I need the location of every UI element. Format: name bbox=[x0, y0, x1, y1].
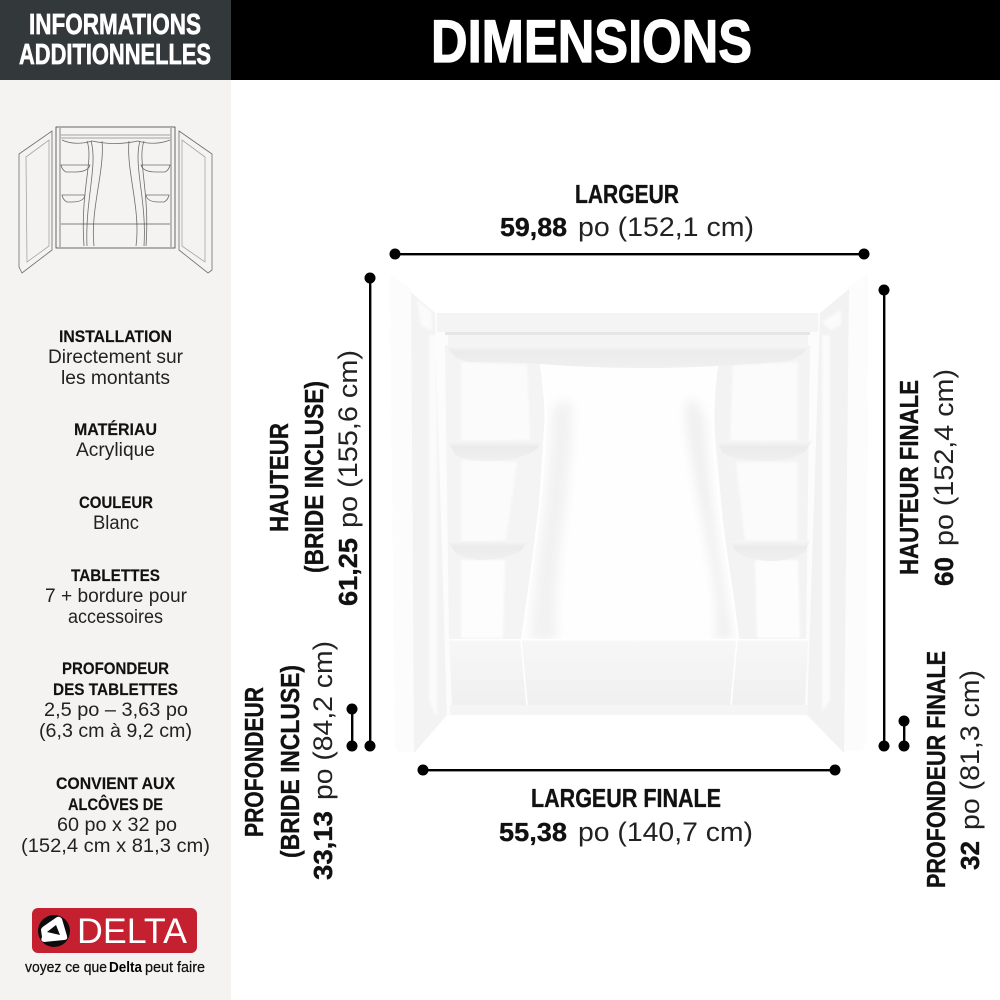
panel: sidebar background bbox=[0, 80, 231, 1000]
text: materiau: Acrylique bbox=[76, 440, 155, 461]
text: installation: Directement sur bbox=[48, 347, 184, 368]
left lower shelf bbox=[448, 541, 527, 560]
text: couleur: Blanc bbox=[93, 513, 139, 534]
label: largeur finale: po (140,7 cm) bbox=[578, 817, 753, 847]
label: hauteur finale: HAUTEUR FINALE bbox=[894, 380, 924, 575]
text: profondeur des tablettes bbox=[39, 659, 192, 742]
label: hauteur: HAUTEUR bbox=[264, 423, 294, 532]
right lower shelf bbox=[730, 541, 810, 561]
text: couleur: COULEUR bbox=[79, 493, 153, 512]
text: tablettes: 7 + bordure pour bbox=[45, 586, 188, 607]
left middle shelf bbox=[448, 441, 542, 461]
center panel bbox=[522, 360, 738, 640]
text: profondeur des tablettes: PROFONDEUR bbox=[62, 659, 169, 678]
header: dimensions title: DIMENSIONS bbox=[431, 8, 752, 75]
right side wall bbox=[807, 273, 868, 752]
text: convient aux alcoves: CONVIENT AUX bbox=[56, 774, 176, 793]
label: largeur finale: LARGEUR FINALE bbox=[531, 783, 721, 813]
label: profondeur: 33,13 bbox=[308, 811, 338, 880]
label: largeur bbox=[500, 179, 754, 242]
label: largeur finale bbox=[499, 783, 753, 847]
label: profondeur finale bbox=[921, 651, 985, 888]
label: profondeur finale: 32 bbox=[955, 841, 985, 870]
dimension line: largeur finale bbox=[418, 764, 840, 776]
label: hauteur finale: po (152,4 cm) bbox=[929, 369, 959, 546]
dimension line: hauteur bbox=[364, 272, 376, 752]
text: profondeur des tablettes: (6,3 cm à 9,2 cm) bbox=[39, 721, 192, 742]
bottom lip bbox=[450, 705, 807, 715]
header: left panel: ADDITIONNELLES bbox=[19, 39, 211, 71]
logo tagline bbox=[25, 959, 205, 976]
product image: shower walls bbox=[390, 273, 868, 752]
label: largeur: po (152,1 cm) bbox=[578, 212, 754, 242]
text: tablettes: accessoires bbox=[68, 607, 163, 628]
icon: line drawing of shower walls bbox=[19, 127, 212, 273]
label: profondeur: (BRIDE INCLUSE) bbox=[275, 665, 305, 858]
dimension line: hauteur finale bbox=[878, 284, 890, 752]
center shadows bbox=[530, 401, 572, 640]
right middle shelf bbox=[717, 441, 812, 461]
label: profondeur: PROFONDEUR bbox=[239, 687, 269, 837]
left wall highlights bbox=[417, 300, 437, 715]
logo tagline: voyez ce que bbox=[25, 959, 107, 976]
text: tablettes: TABLETTES bbox=[71, 566, 160, 585]
right flange bbox=[844, 273, 868, 752]
label: hauteur finale: 60 bbox=[929, 557, 959, 586]
back wall bbox=[435, 313, 820, 715]
label: hauteur finale bbox=[894, 369, 959, 586]
dimension line: largeur bbox=[390, 248, 870, 260]
dimension line: profondeur bbox=[346, 704, 358, 752]
label: hauteur bbox=[264, 350, 363, 606]
header: left panel: INFORMATIONS bbox=[29, 9, 201, 41]
label: profondeur: po (84,2 cm) bbox=[308, 641, 338, 800]
logo: delta: DELTA bbox=[77, 912, 188, 951]
label: hauteur: po (155,6 cm) bbox=[333, 350, 363, 528]
label: hauteur: (BRIDE INCLUSE) bbox=[299, 381, 329, 573]
text: profondeur des tablettes: DES TABLETTES bbox=[53, 680, 178, 699]
text: convient aux alcoves: 60 po x 32 po bbox=[57, 815, 177, 836]
logo tagline: peut faire bbox=[145, 959, 205, 976]
label: largeur: 59,88 bbox=[500, 212, 567, 242]
text: materiau: MATÉRIAU bbox=[74, 420, 157, 439]
text: couleur bbox=[79, 493, 153, 534]
left side alcove column bbox=[445, 345, 545, 640]
top rim bbox=[437, 313, 818, 332]
text: materiau bbox=[74, 420, 157, 461]
text: installation bbox=[48, 327, 184, 389]
left flange bbox=[390, 274, 414, 752]
right wall highlights bbox=[822, 310, 841, 712]
logo tagline: Delta bbox=[109, 959, 143, 976]
label: hauteur: 61,25 bbox=[333, 538, 363, 606]
right side alcove column bbox=[713, 345, 810, 640]
left side wall bbox=[390, 274, 447, 752]
label: profondeur finale: PROFONDEUR FINALE bbox=[921, 651, 951, 888]
left highlight edge bbox=[522, 362, 545, 640]
top shelf shadow bbox=[447, 345, 810, 368]
dimension line: profondeur finale bbox=[898, 716, 910, 752]
text: convient aux alcoves: (152,4 cm x 81,3 cm) bbox=[21, 836, 210, 857]
right highlight edge bbox=[713, 360, 738, 640]
text: convient aux alcoves bbox=[21, 774, 210, 857]
header: left panel bbox=[0, 0, 231, 80]
tub apron bbox=[449, 640, 808, 705]
label: profondeur bbox=[239, 641, 338, 880]
text: profondeur des tablettes: 2,5 po – 3,63 po bbox=[44, 700, 188, 721]
header: dimensions title bbox=[231, 0, 1000, 80]
label: largeur: LARGEUR bbox=[575, 179, 679, 209]
label: largeur finale: 55,38 bbox=[499, 817, 567, 847]
logo: delta bbox=[32, 908, 197, 953]
label: profondeur finale: po (81,3 cm) bbox=[955, 670, 985, 830]
text: tablettes bbox=[45, 566, 188, 628]
text: installation: INSTALLATION bbox=[59, 327, 172, 346]
text: convient aux alcoves: ALCÔVES DE bbox=[68, 795, 163, 814]
text: installation: les montants bbox=[61, 368, 170, 389]
